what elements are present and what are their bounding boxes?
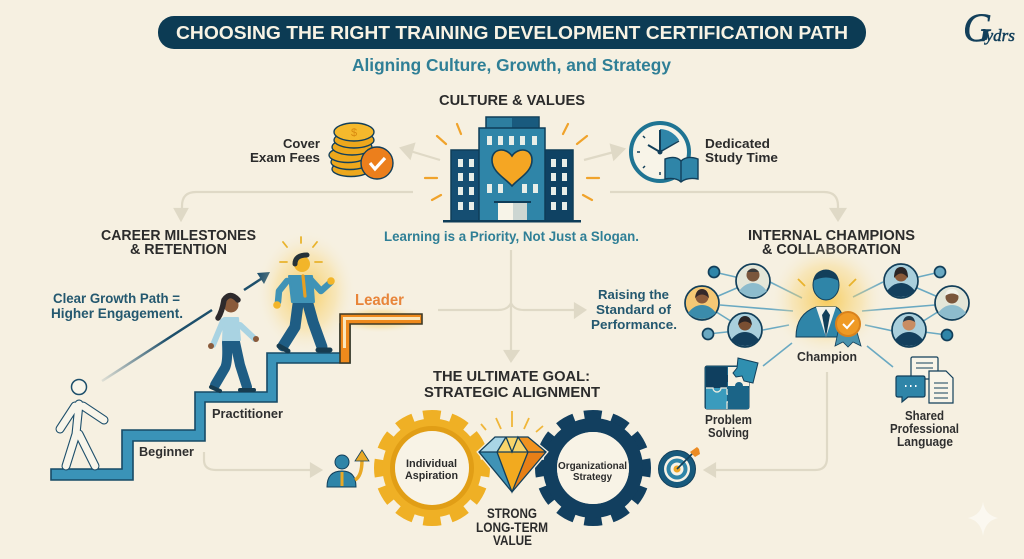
callout: clear growth path — [51, 291, 183, 321]
heading: the ultimate goal: THE ULTIMATE GOAL: — [433, 369, 590, 385]
icon: target with arrow — [658, 447, 700, 488]
icon: coin stack with check: $ — [351, 127, 357, 139]
heading: culture and values: CULTURE & VALUES — [439, 93, 585, 109]
people avatars: left group — [685, 264, 770, 347]
callout: clear growth path: Higher Engagement. — [51, 306, 183, 321]
gear: individual aspiration — [380, 416, 484, 520]
figure: leader with rays — [273, 237, 335, 351]
label: dedicated study time: Dedicated — [705, 136, 770, 151]
label: raising the standard: Standard of — [596, 302, 672, 317]
gear: organizational strategy: Organizational — [558, 460, 627, 472]
figure: practitioner — [208, 296, 259, 391]
heading: career milestones — [101, 228, 256, 258]
heading: internal champions: & COLLABORATION — [762, 242, 901, 258]
people avatars: right group — [884, 264, 969, 347]
label: problem solving — [705, 412, 752, 440]
connector arrows — [175, 144, 845, 476]
step labels — [139, 292, 404, 459]
label: cover exam fees: Exam Fees — [250, 150, 320, 165]
label: dedicated study time: Study Time — [705, 150, 778, 165]
icon: puzzle pieces — [705, 358, 758, 409]
icon: documents and speech bubble — [896, 357, 953, 403]
callout: clear growth path: Clear Growth Path = — [53, 291, 180, 306]
icon: champion with badge — [769, 242, 885, 358]
icon: coin stack with check — [329, 123, 393, 179]
label: strong long-term value: STRONG — [487, 506, 537, 521]
label: strong long-term value: LONG-TERM — [476, 520, 548, 535]
title banner: CHOOSING THE RIGHT TRAINING DEVELOPMENT CERTIFICATION PATH — [176, 22, 848, 43]
label: raising the standard: Raising the — [598, 287, 669, 302]
icon: diamond — [479, 411, 546, 492]
label: champion: Champion — [797, 349, 857, 364]
label: raising the standard — [591, 287, 677, 332]
label: shared professional language: Professional — [890, 421, 959, 436]
label: dedicated study time — [705, 136, 778, 165]
subtitle: Aligning Culture, Growth, and Strategy — [352, 55, 671, 75]
label: strong long-term value — [476, 506, 548, 548]
icon: person with up arrow — [327, 450, 369, 487]
arrow: growth path — [102, 272, 270, 381]
network: connecting lines — [702, 272, 952, 367]
figure: beginner — [60, 380, 104, 466]
logo: Glydrs — [963, 5, 1015, 50]
gear: individual aspiration: Individual — [406, 458, 457, 470]
icon: clock and book — [631, 123, 698, 182]
label: cover exam fees — [250, 136, 320, 165]
heading: internal champions — [748, 228, 915, 258]
label: shared professional language: Shared — [905, 408, 944, 423]
icon: building with heart — [425, 117, 599, 222]
heading: career milestones: & RETENTION — [130, 242, 227, 258]
label: raising the standard: Performance. — [591, 317, 677, 332]
heading: career milestones: CAREER MILESTONES — [101, 228, 256, 244]
label: problem solving: Problem — [705, 412, 752, 427]
step labels: Beginner — [139, 444, 194, 459]
staircase — [51, 314, 422, 480]
step labels: Leader — [355, 292, 404, 309]
heading: the ultimate goal — [424, 369, 600, 401]
glow behind leader — [256, 230, 356, 354]
gear: organizational strategy — [541, 416, 645, 520]
gear: individual aspiration: Aspiration — [405, 470, 458, 482]
tagline: learning is a priority: Learning is a Priority, Not Just a Slogan. — [384, 229, 639, 244]
title banner — [158, 16, 866, 49]
step labels: Practitioner — [212, 406, 283, 421]
label: cover exam fees: Cover — [283, 136, 320, 151]
label: shared professional language — [890, 408, 959, 449]
gear: organizational strategy: Strategy — [573, 471, 612, 483]
heading: the ultimate goal: STRATEGIC ALIGNMENT — [424, 385, 600, 401]
label: problem solving: Solving — [708, 425, 749, 440]
label: shared professional language: Language — [897, 434, 953, 449]
label: strong long-term value: VALUE — [493, 533, 532, 548]
heading: internal champions: INTERNAL CHAMPIONS — [748, 228, 915, 244]
icon: sparkle — [968, 502, 998, 536]
